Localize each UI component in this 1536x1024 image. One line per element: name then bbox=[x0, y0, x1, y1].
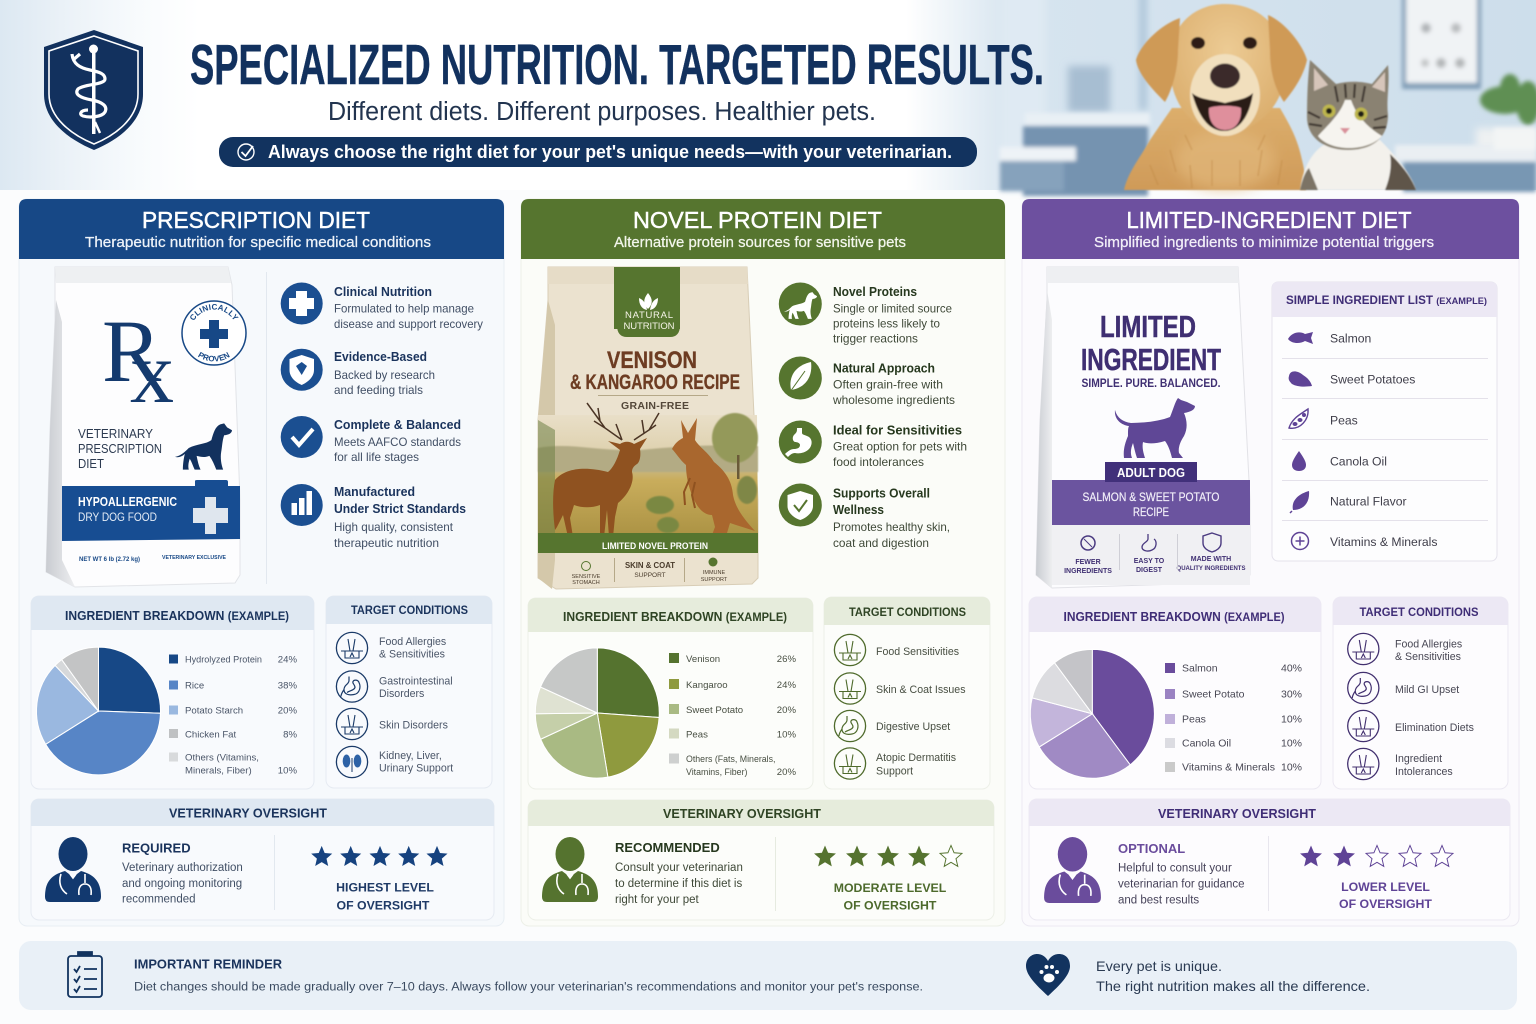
feature: ideal for sensitivities: food intolerances bbox=[833, 456, 924, 469]
product bag: limited ingredient: FEWER bbox=[1075, 559, 1101, 566]
product bag: venison and kangaroo: NUTRITION bbox=[624, 321, 675, 332]
product bag: venison and kangaroo: STOMACH bbox=[572, 580, 600, 586]
product bag: limited ingredient: LIMITED bbox=[1100, 309, 1196, 344]
feature: manufactured: Manufactured bbox=[334, 484, 415, 499]
feature: ideal for sensitivities: Great option for pets with bbox=[833, 440, 967, 454]
illustration: tabby cat bbox=[1300, 60, 1416, 190]
product bag: limited ingredient: INGREDIENTS bbox=[1064, 568, 1112, 575]
pack landscape bbox=[538, 403, 758, 537]
reminder banner bbox=[19, 941, 1517, 1010]
legend: 8% bbox=[283, 730, 297, 740]
panel header bbox=[521, 199, 1005, 259]
card: target conditions: Mild GI Upset bbox=[1395, 684, 1459, 696]
card: veterinary oversight: VETERINARY OVERSIGHT bbox=[169, 806, 327, 820]
product bag: limited ingredient: ADULT DOG bbox=[1117, 466, 1185, 480]
feature: ideal for sensitivities: Ideal for Sensitivities bbox=[833, 422, 962, 438]
legend bbox=[1165, 662, 1302, 774]
legend: 10% bbox=[777, 730, 796, 740]
card: veterinary oversight: HIGHEST LEVEL bbox=[336, 880, 434, 894]
card: target conditions: TARGET CONDITIONS bbox=[849, 605, 966, 619]
panel header: Alternative protein sources for sensitive pets bbox=[614, 235, 906, 251]
kangaroo bbox=[672, 418, 755, 535]
legend bbox=[169, 654, 297, 776]
legend: 20% bbox=[278, 706, 297, 716]
card: veterinary oversight: MODERATE LEVEL bbox=[834, 881, 947, 895]
feature: manufactured: High quality, consistent bbox=[334, 521, 454, 534]
card: veterinary oversight: to determine if this diet is bbox=[615, 878, 742, 890]
feature: novel proteins: proteins less likely to bbox=[833, 318, 940, 330]
badge: clinically proven bbox=[181, 300, 247, 366]
feature: natural approach: wholesome ingredients bbox=[832, 394, 955, 407]
icon: heart with paw bbox=[1026, 954, 1070, 996]
legend: Venison bbox=[686, 654, 720, 665]
product bag: limited ingredient bbox=[1036, 267, 1250, 588]
product bag: limited ingredient: MADE WITH bbox=[1191, 556, 1231, 563]
card: ingredient breakdown bbox=[528, 598, 813, 789]
feature: novel proteins: Novel Proteins bbox=[833, 284, 917, 299]
product bag: limited ingredient: INGREDIENT bbox=[1081, 342, 1221, 377]
header banner bbox=[0, 0, 1536, 196]
product bag: prescription: VETERINARY bbox=[78, 427, 154, 441]
card: veterinary oversight: OPTIONAL bbox=[1118, 841, 1185, 856]
legend: 40% bbox=[1281, 662, 1302, 674]
card: veterinary oversight: VETERINARY OVERSIGHT bbox=[663, 806, 821, 821]
card: target conditions: Kidney, Liver, bbox=[379, 750, 442, 762]
feature: clinical nutrition bbox=[281, 282, 483, 331]
legend: Sweet Potato bbox=[686, 705, 743, 716]
card: simple ingredient list: Canola Oil bbox=[1330, 454, 1387, 468]
panel header: Therapeutic nutrition for specific medical conditions bbox=[85, 235, 431, 251]
card: veterinary oversight: RECOMMENDED bbox=[615, 840, 720, 855]
legend: Vitamins & Minerals bbox=[1182, 762, 1275, 774]
legend bbox=[669, 653, 796, 778]
product bag: venison and kangaroo: SKIN & COAT bbox=[625, 561, 675, 570]
star rating: 4 of 5 bbox=[814, 845, 962, 866]
feature: overall wellness: coat and digestion bbox=[833, 537, 929, 550]
star rating: 2 of 5 bbox=[1300, 845, 1453, 866]
card: target conditions bbox=[824, 597, 990, 789]
icon: purple dog bbox=[1115, 398, 1195, 458]
legend: 24% bbox=[278, 654, 297, 666]
feature: natural approach bbox=[779, 356, 955, 407]
reminder banner: Every pet is unique. bbox=[1096, 958, 1222, 974]
feature: novel proteins: trigger reactions bbox=[833, 332, 918, 346]
legend: Peas bbox=[686, 730, 708, 740]
title: SPECIALIZED NUTRITION. TARGETED RESULTS. bbox=[190, 33, 1044, 97]
card: simple ingredient list bbox=[1272, 282, 1497, 561]
panel header: LIMITED-INGREDIENT DIET bbox=[1126, 207, 1412, 233]
product bag: venison and kangaroo: GRAIN-FREE bbox=[621, 400, 689, 412]
panel: prescription diet bbox=[18, 198, 504, 926]
card: simple ingredient list: Salmon bbox=[1330, 332, 1371, 346]
card: veterinary oversight bbox=[528, 800, 994, 920]
feature: natural approach: Often grain-free with bbox=[833, 378, 943, 392]
product bag: limited ingredient: RECIPE bbox=[1133, 505, 1169, 519]
feature: novel proteins bbox=[779, 282, 952, 346]
card: target conditions: TARGET CONDITIONS bbox=[351, 603, 468, 617]
card: veterinary oversight: and best results bbox=[1118, 894, 1199, 906]
card: target conditions: & Sensitivities bbox=[1395, 651, 1461, 663]
legend: Potato Starch bbox=[185, 706, 243, 716]
card: target conditions: TARGET CONDITIONS bbox=[1360, 605, 1478, 619]
card: veterinary oversight bbox=[1029, 799, 1510, 920]
legend: Kangaroo bbox=[686, 680, 728, 691]
card: veterinary oversight: OF OVERSIGHT bbox=[1339, 897, 1432, 911]
card: simple ingredient list: Natural Flavor bbox=[1330, 494, 1407, 508]
feature: evidence based: Backed by research bbox=[334, 369, 435, 382]
legend: Chicken Fat bbox=[185, 730, 237, 740]
card: veterinary oversight: and ongoing monitoring bbox=[122, 878, 242, 890]
legend: Others (Fats, Minerals, bbox=[686, 754, 775, 764]
panel header: Simplified ingredients to minimize potential triggers bbox=[1094, 235, 1434, 251]
feature: manufactured: Under Strict Standards bbox=[334, 501, 466, 516]
product bag: prescription: VETERINARY EXCLUSIVE bbox=[162, 555, 226, 561]
card: veterinary oversight: Consult your veterinarian bbox=[615, 862, 743, 874]
legend: 10% bbox=[278, 766, 297, 776]
pie chart bbox=[535, 648, 659, 778]
legend: Canola Oil bbox=[1182, 738, 1231, 750]
icon: kidney bbox=[336, 746, 368, 778]
icon: veterinarian bbox=[1044, 837, 1101, 903]
legend: 24% bbox=[777, 680, 796, 691]
card: target conditions: Atopic Dermatitis bbox=[876, 752, 956, 764]
icon: shield logo bbox=[44, 30, 143, 150]
card: simple ingredient list: Peas bbox=[1330, 414, 1358, 428]
feature: natural approach: Natural Approach bbox=[833, 360, 935, 376]
card: target conditions: Skin Disorders bbox=[379, 720, 448, 732]
panel: novel protein diet bbox=[521, 199, 1005, 926]
panel header: PRESCRIPTION DIET bbox=[142, 207, 370, 233]
feature: overall wellness: Wellness bbox=[833, 502, 884, 517]
card: simple ingredient list: SIMPLE INGREDIENT LIST (EXAMPLE) bbox=[1286, 293, 1487, 307]
reminder banner: Diet changes should be made gradually over 7–10 days. Always follow your veterinarian's recommendations and monitor your pet's response. bbox=[134, 980, 923, 994]
panel header bbox=[19, 199, 504, 259]
icon: veterinarian bbox=[45, 837, 101, 902]
product bag: limited ingredient: EASY TO bbox=[1134, 558, 1165, 565]
card: target conditions bbox=[326, 596, 492, 788]
product bag: prescription: R bbox=[102, 303, 162, 401]
deer bbox=[553, 438, 647, 537]
badge: clinically proven: CLINICALLY bbox=[190, 304, 239, 320]
product bag: prescription: PRESCRIPTION bbox=[78, 442, 162, 456]
product bag: venison and kangaroo bbox=[538, 267, 758, 589]
card: target conditions: Support bbox=[876, 766, 913, 778]
feature list: novel protein bbox=[779, 282, 967, 550]
feature: manufactured bbox=[281, 484, 466, 550]
product bag: prescription: NET WT 6 lb (2.72 kg) bbox=[79, 556, 140, 563]
callout pill: Always choose the right diet for your pet's unique needs—with your veterinarian. bbox=[268, 141, 952, 162]
card: target conditions: Digestive Upset bbox=[876, 721, 950, 733]
card: veterinary oversight: VETERINARY OVERSIGHT bbox=[1158, 806, 1316, 821]
card: ingredient breakdown: INGREDIENT BREAKDOWN (EXAMPLE) bbox=[1064, 610, 1285, 624]
badge: clinically proven: PROVEN bbox=[198, 352, 230, 362]
feature: clinical nutrition: Formulated to help manage bbox=[334, 302, 474, 316]
feature list: prescription bbox=[281, 282, 483, 550]
card: target conditions: Disorders bbox=[379, 688, 424, 700]
card: veterinary oversight: right for your pet bbox=[615, 894, 700, 906]
legend: Vitamins, Fiber) bbox=[686, 767, 748, 777]
feature: clinical nutrition: Clinical Nutrition bbox=[334, 284, 432, 299]
blurred clinic background bbox=[1000, 0, 1536, 196]
card: target conditions: Intolerances bbox=[1395, 766, 1453, 778]
card: veterinary oversight: REQUIRED bbox=[122, 840, 191, 856]
feature: evidence based: and feeding trials bbox=[334, 384, 423, 397]
card: target conditions: Food Allergies bbox=[1395, 638, 1462, 650]
pie chart bbox=[1030, 649, 1154, 778]
icon: veterinarian bbox=[542, 837, 598, 902]
subtitle: Different diets. Different purposes. Healthier pets. bbox=[328, 98, 876, 126]
product bag: venison and kangaroo: VENISON bbox=[607, 347, 697, 374]
card: simple ingredient list: Vitamins & Minerals bbox=[1330, 535, 1437, 549]
card: target conditions: Food Sensitivities bbox=[876, 646, 959, 658]
feature: complete and balanced: for all life stages bbox=[334, 451, 419, 464]
card: ingredient breakdown: INGREDIENT BREAKDOWN (EXAMPLE) bbox=[563, 610, 787, 624]
icon: clipboard checklist bbox=[68, 952, 102, 997]
legend: 26% bbox=[777, 654, 796, 665]
card: simple ingredient list: Sweet Potatoes bbox=[1330, 372, 1415, 386]
reminder banner: The right nutrition makes all the difference. bbox=[1096, 978, 1370, 994]
card: veterinary oversight: OF OVERSIGHT bbox=[337, 898, 430, 912]
card: veterinary oversight: Veterinary authorization bbox=[122, 862, 243, 874]
card: ingredient breakdown bbox=[31, 596, 314, 789]
feature: complete and balanced bbox=[281, 416, 461, 464]
panel header: NOVEL PROTEIN DIET bbox=[633, 207, 882, 233]
product bag: prescription bbox=[46, 266, 247, 588]
feature: clinical nutrition: disease and support recovery bbox=[334, 318, 483, 331]
card: target conditions: Food Allergies bbox=[379, 636, 446, 648]
card: veterinary oversight: Helpful to consult your bbox=[1118, 862, 1232, 874]
product bag: venison and kangaroo: IMMUNE bbox=[703, 570, 725, 576]
legend: Rice bbox=[185, 680, 204, 692]
legend: Hydrolyzed Protein bbox=[185, 654, 262, 666]
feature: complete and balanced: Complete & Balanced bbox=[334, 417, 461, 432]
legend: 38% bbox=[278, 680, 297, 692]
product bag: venison and kangaroo: NATURAL bbox=[625, 310, 673, 321]
feature: evidence based: Evidence-Based bbox=[334, 349, 427, 364]
reminder banner: IMPORTANT REMINDER bbox=[134, 956, 282, 972]
product bag: limited ingredient: SALMON & SWEET POTATO bbox=[1082, 490, 1220, 504]
star rating: 5 of 5 bbox=[311, 846, 448, 866]
legend: 10% bbox=[1281, 762, 1302, 774]
product bag: limited ingredient: QUALITY INGREDIENTS bbox=[1177, 566, 1245, 572]
card: target conditions: & Sensitivities bbox=[379, 648, 445, 660]
feature: overall wellness: Promotes healthy skin, bbox=[833, 521, 950, 534]
card: target conditions: Skin & Coat Issues bbox=[876, 684, 966, 696]
legend: 20% bbox=[777, 767, 796, 778]
pie chart bbox=[37, 647, 160, 775]
product bag: venison and kangaroo: & KANGAROO RECIPE bbox=[570, 371, 740, 394]
product bag: prescription: x bbox=[130, 325, 174, 422]
product bag: venison and kangaroo: SENSITIVE bbox=[572, 574, 601, 580]
card: ingredient breakdown bbox=[1029, 597, 1321, 789]
feature: overall wellness: Supports Overall bbox=[833, 486, 930, 500]
product bag: prescription: DIET bbox=[78, 457, 104, 471]
feature: ideal for sensitivities bbox=[779, 420, 967, 469]
feature: novel proteins: Single or limited source bbox=[833, 302, 952, 316]
feature: overall wellness bbox=[779, 484, 950, 550]
card: veterinary oversight: recommended bbox=[122, 894, 196, 906]
panel header bbox=[1022, 199, 1519, 259]
card: target conditions: Elimination Diets bbox=[1395, 722, 1474, 734]
product bag: venison and kangaroo: LIMITED NOVEL PROTEIN bbox=[602, 541, 708, 551]
legend: Minerals, Fiber) bbox=[185, 766, 252, 776]
legend: 20% bbox=[777, 705, 796, 716]
callout pill bbox=[219, 137, 977, 167]
product bag: prescription: HYPOALLERGENIC bbox=[78, 495, 177, 509]
product bag: venison and kangaroo: SUPPORT bbox=[634, 572, 666, 579]
legend: 10% bbox=[1281, 714, 1302, 726]
panel: limited-ingredient diet bbox=[1022, 199, 1519, 926]
card: target conditions: Ingredient bbox=[1395, 753, 1442, 765]
card: veterinary oversight: veterinarian for guidance bbox=[1118, 878, 1245, 890]
feature: manufactured: therapeutic nutrition bbox=[334, 537, 439, 550]
legend: Salmon bbox=[1182, 662, 1218, 674]
legend: Sweet Potato bbox=[1182, 688, 1245, 700]
legend: Others (Vitamins, bbox=[185, 752, 259, 764]
legend: Peas bbox=[1182, 714, 1206, 726]
ingredient icons bbox=[1288, 332, 1313, 550]
product bag: prescription: DRY DOG FOOD bbox=[78, 512, 157, 524]
legend: 30% bbox=[1281, 688, 1302, 700]
product bag: venison and kangaroo: SUPPORT bbox=[701, 577, 728, 583]
card: veterinary oversight bbox=[31, 799, 494, 920]
feature: evidence based bbox=[281, 349, 435, 397]
feature: complete and balanced: Meets AAFCO standards bbox=[334, 436, 461, 449]
card: veterinary oversight: LOWER LEVEL bbox=[1341, 880, 1430, 894]
legend: 10% bbox=[1281, 738, 1302, 750]
product bag: limited ingredient: SIMPLE. PURE. BALANCED. bbox=[1082, 376, 1220, 390]
card: ingredient breakdown: INGREDIENT BREAKDOWN (EXAMPLE) bbox=[65, 609, 289, 623]
card: target conditions: Gastrointestinal bbox=[379, 676, 453, 688]
product bag: limited ingredient: DIGEST bbox=[1136, 567, 1163, 574]
illustration: golden retriever bbox=[1124, 4, 1307, 190]
card: target conditions: Urinary Support bbox=[379, 762, 453, 774]
card: target conditions bbox=[1333, 597, 1508, 789]
card: veterinary oversight: OF OVERSIGHT bbox=[844, 898, 937, 912]
